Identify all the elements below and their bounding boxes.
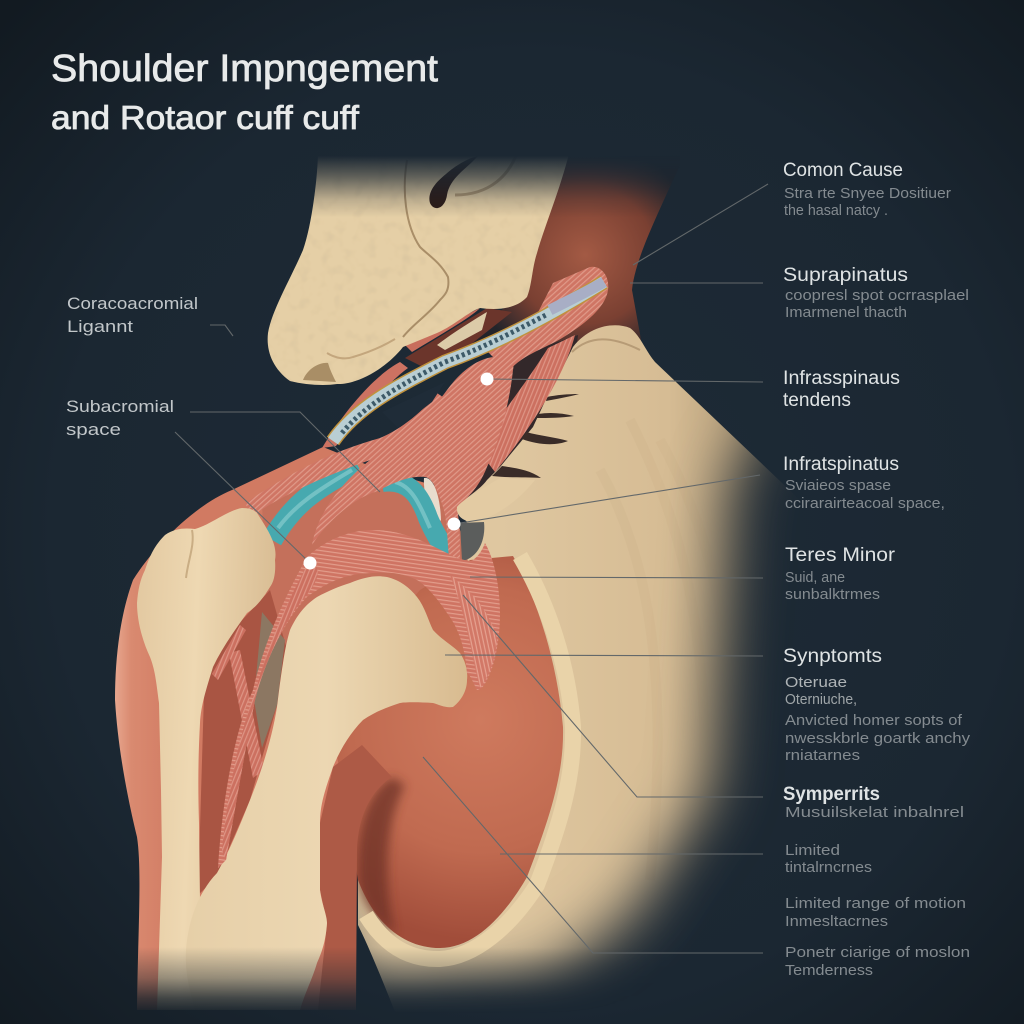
label: supraspinatus xyxy=(783,265,969,321)
label: infraspinatus: ccirarairteacoal space, xyxy=(785,495,945,512)
label: symptoms list: Limited xyxy=(785,842,840,859)
title: and Rotaor cuff cuff xyxy=(51,99,360,136)
label: symptoms: Synptomts xyxy=(783,646,882,667)
label: teres minor: Teres Minor xyxy=(785,545,896,566)
grey gap xyxy=(254,612,285,748)
label: infraspinatus tendons: tendens xyxy=(783,390,851,411)
dark pocket xyxy=(460,522,484,561)
label: teres minor: sunbalktrmes xyxy=(785,586,880,603)
under jaw tissue xyxy=(405,308,512,368)
humerus xyxy=(186,576,467,1010)
label: infraspinatus tendons xyxy=(783,368,900,411)
label: symptoms list: Symperrits xyxy=(783,784,880,805)
scapula rim xyxy=(366,556,573,959)
label: infraspinatus: Infratspinatus xyxy=(783,454,899,475)
left bone xyxy=(137,508,276,1010)
label: symptoms xyxy=(783,646,971,764)
title: Shoulder Impngement xyxy=(51,48,438,90)
arch left leg fibres xyxy=(222,560,318,860)
label: coracoacromial ligament xyxy=(67,294,198,336)
label: symptoms list xyxy=(783,784,970,979)
label: symptoms: Anvicted homer sopts of xyxy=(785,712,963,729)
teal tendon left xyxy=(272,466,358,540)
upper filler muscle xyxy=(262,486,468,645)
label: teres minor: Suid, ane xyxy=(785,569,845,586)
neck xyxy=(474,166,670,345)
label: subacromial space: Subacromial xyxy=(66,397,174,416)
label: symptoms list: Musuilskelat inbalnrel xyxy=(785,804,964,821)
jaw fold xyxy=(327,339,395,358)
posterior muscle band xyxy=(488,335,575,472)
label: symptoms: rniatarnes xyxy=(785,747,860,764)
recess in muscle xyxy=(358,777,405,935)
dark gap beside scapula xyxy=(470,335,578,495)
red band beside humerus xyxy=(318,745,392,1010)
dark wedge under strip xyxy=(421,393,438,410)
label: symptoms list: Ponetr ciarige of moslon xyxy=(785,944,970,961)
infraspinatus triangle muscle xyxy=(312,357,513,560)
skull xyxy=(268,150,570,385)
label: symptoms list: tintalrncrnes xyxy=(785,859,872,876)
left strap under strip xyxy=(322,362,408,448)
label: common cause: Stra rte Snyee Dositiuer xyxy=(784,185,951,202)
label: teres minor xyxy=(785,545,896,603)
label: common cause: Comon Cause xyxy=(783,160,903,181)
label: coracoacromial ligament: Ligannt xyxy=(67,317,133,336)
label: supraspinatus: coopresl spot ocrrasplael xyxy=(785,287,969,304)
teal tendon right xyxy=(382,481,448,554)
upper left band xyxy=(245,393,447,516)
deep muscle between bones xyxy=(198,590,290,895)
skull suture xyxy=(403,160,448,337)
label: symptoms list: Temderness xyxy=(785,962,873,979)
label: subacromial space xyxy=(66,397,174,439)
label: symptoms list: Limited range of motion xyxy=(785,895,966,912)
label: symptoms: Oterniuche, xyxy=(785,691,857,708)
scapula finger slits xyxy=(492,394,579,478)
teres arch muscle xyxy=(218,530,500,868)
thin crossing strips xyxy=(212,625,264,778)
ligament strip xyxy=(333,282,604,441)
shoulder cap shadow xyxy=(572,339,640,352)
title xyxy=(51,48,438,136)
label: common cause xyxy=(783,160,951,219)
label: common cause: the hasal natcy . xyxy=(784,202,888,219)
marker dots xyxy=(304,372,494,570)
label: supraspinatus: Suprapinatus xyxy=(783,265,908,286)
label: infraspinatus: Sviaieos spase xyxy=(785,477,891,494)
label: coracoacromial ligament: Coracoacromial xyxy=(67,294,198,313)
label: infraspinatus tendons: Infrasspinaus xyxy=(783,368,900,389)
label: symptoms: nwesskbrle goartk anchy xyxy=(785,730,971,747)
label: subacromial space: space xyxy=(66,420,121,439)
leader lines xyxy=(175,184,768,953)
pale tendon xyxy=(424,478,441,526)
ear xyxy=(429,156,478,208)
torso and scapula xyxy=(358,325,800,1024)
arch lower tail fibres xyxy=(450,575,497,688)
deltoid back xyxy=(115,447,470,1010)
label: supraspinatus: Imarmenel thacth xyxy=(785,304,907,321)
nostril xyxy=(303,363,336,382)
big muscle belly xyxy=(325,556,563,948)
label: symptoms: Oteruae xyxy=(785,674,847,691)
scapular spine tip xyxy=(456,498,466,521)
ear fold xyxy=(455,166,512,196)
supraspinatus muscle xyxy=(488,267,608,372)
label: symptoms list: Inmesltacrnes xyxy=(785,913,888,930)
anatomy illustration xyxy=(115,150,800,1024)
label: infraspinatus xyxy=(783,454,945,512)
